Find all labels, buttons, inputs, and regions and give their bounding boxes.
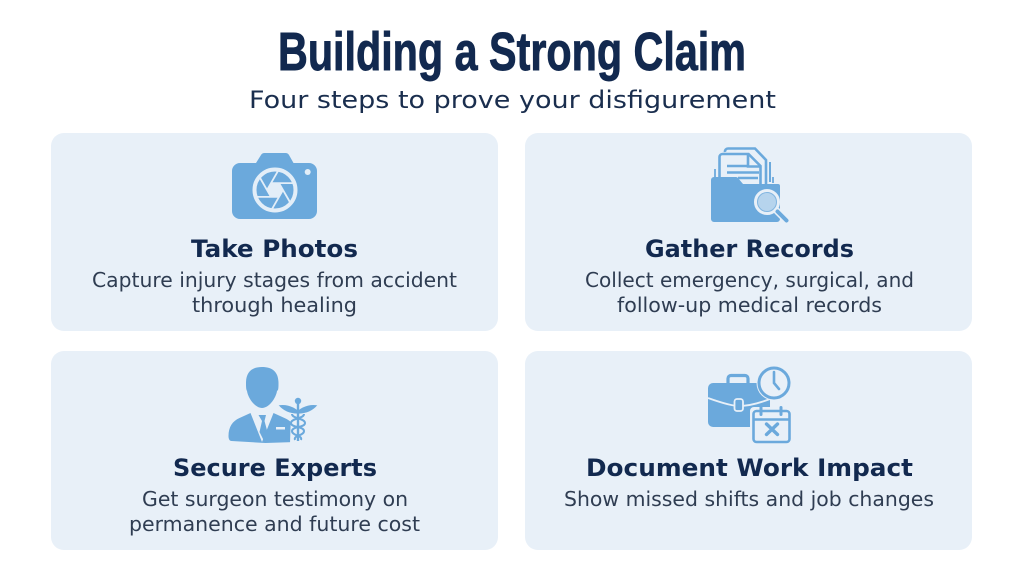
text: secure experts description: permanence and future cost <box>129 512 420 536</box>
text: secure experts description: Get surgeon testimony on <box>142 487 408 511</box>
heading: gather records: Gather Records <box>645 235 854 263</box>
subtitle: Four steps to prove your disfigurement <box>249 86 776 114</box>
heading: secure experts: Secure Experts <box>173 454 377 482</box>
text: secure experts description <box>129 487 420 536</box>
text: document work impact description: Show missed shifts and job changes <box>564 487 934 511</box>
text: gather records description: Collect emergency, surgical, and <box>585 268 914 292</box>
text: take photos description: Capture injury stages from accident <box>92 268 457 292</box>
panel: document work impact <box>525 351 972 550</box>
text: take photos description: through healing <box>192 293 357 317</box>
heading: take photos: Take Photos <box>191 235 358 263</box>
text: gather records description <box>585 268 914 317</box>
text: gather records description: follow-up medical records <box>617 293 882 317</box>
title: Building a Strong Claim <box>278 22 746 82</box>
panel: take photos <box>51 133 498 331</box>
panel: gather records <box>525 133 972 331</box>
icon: expert with caduceus <box>228 367 318 443</box>
text: take photos description <box>92 268 457 317</box>
panel: secure experts <box>51 351 498 550</box>
heading: document work impact: Document Work Impact <box>586 454 913 482</box>
icon: briefcase, clock and calendar <box>708 366 793 445</box>
icon: folder with magnifier <box>711 148 786 222</box>
icon: camera <box>232 153 317 219</box>
